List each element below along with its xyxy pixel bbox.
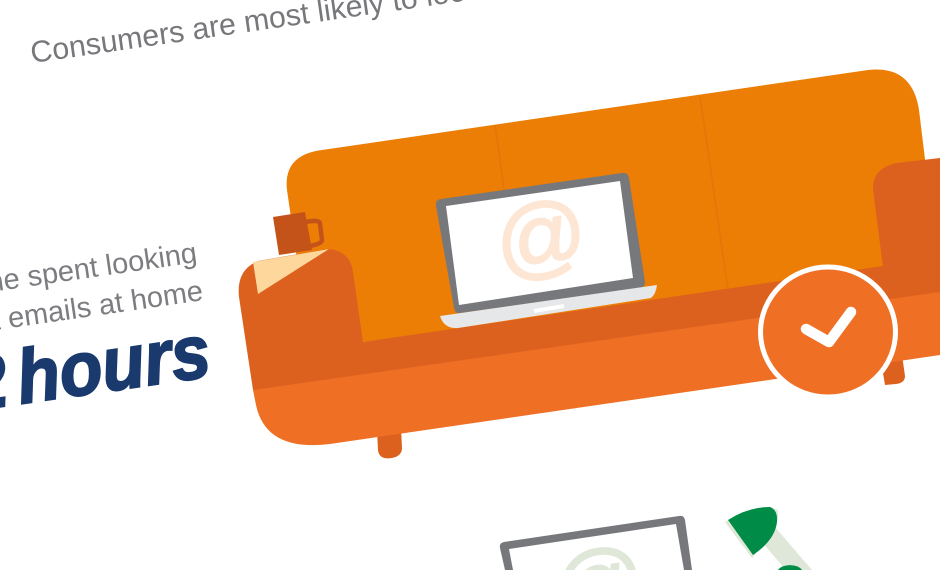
- icon: laptop with at sign: @: [489, 181, 593, 293]
- cushion fold: [253, 249, 329, 294]
- sofa front: [253, 292, 940, 445]
- icon: desk lamp: [725, 507, 812, 570]
- sofa right arm: [873, 158, 940, 270]
- sofa back: [287, 70, 930, 342]
- sofa right leg: [880, 355, 905, 385]
- text block: time spent at home: [0, 237, 215, 427]
- icon: laptop with at sign: [436, 173, 657, 328]
- sofa left leg: [377, 428, 402, 458]
- icon: sofa: [239, 70, 940, 458]
- icon: second laptop: [500, 516, 692, 570]
- badge: check mark: [760, 267, 896, 397]
- sofa seat band: [250, 258, 940, 395]
- icon: mug: [273, 212, 322, 255]
- sofa seams: [495, 96, 728, 290]
- sofa left arm: [239, 249, 363, 390]
